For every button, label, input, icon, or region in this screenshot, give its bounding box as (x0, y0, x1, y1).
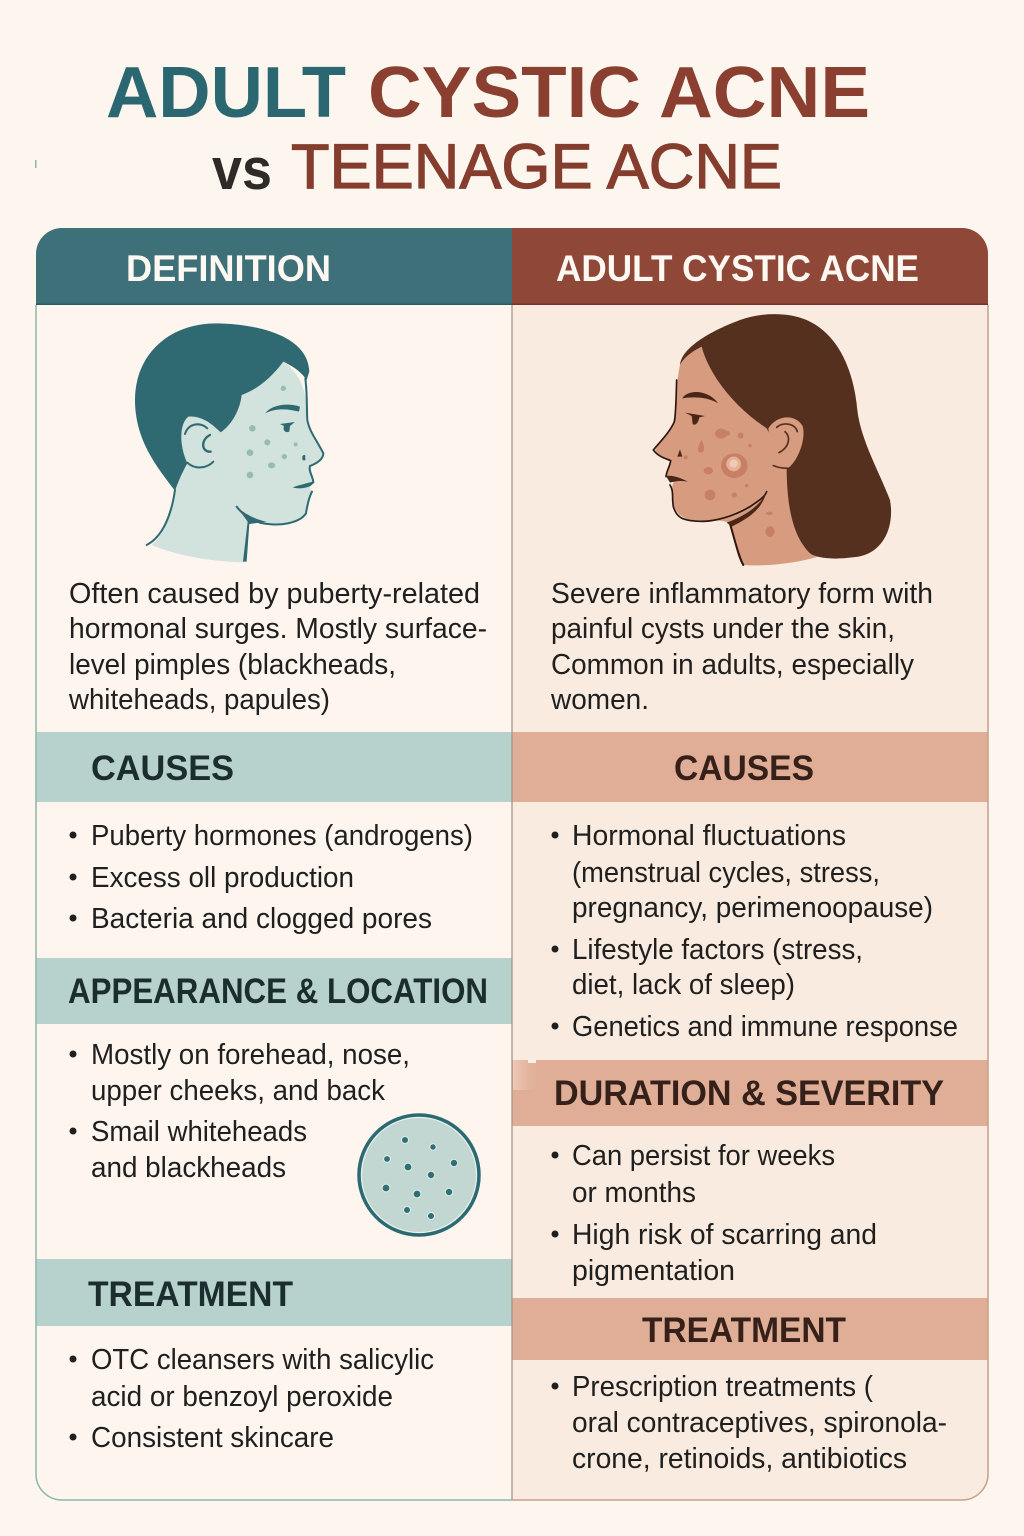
title line 1: ADULT (106, 53, 346, 133)
title line 2: vs (212, 137, 272, 202)
list: causes (adult): diet, lack of sleep) (572, 969, 795, 1001)
list: causes (teenage) (70, 820, 473, 935)
list: duration and severity: Can persist for weeks (572, 1140, 835, 1172)
list: duration and severity: pigmentation (572, 1255, 735, 1287)
definition text: teenage (68, 578, 487, 716)
list: treatment (adult): oral contraceptives, spironola- (572, 1407, 947, 1439)
list: causes (adult): Genetics and immune response (572, 1011, 958, 1043)
list: duration and severity: High risk of scarring and (572, 1219, 877, 1251)
definition text: adult: women. (550, 684, 649, 716)
heading: appearance and location: APPEARANCE & LOCATION (68, 972, 488, 1011)
list: treatment (adult): crone, retinoids, antibiotics (572, 1443, 907, 1475)
definition text: teenage: Often caused by puberty-related (69, 578, 480, 610)
icon: adult face profile (653, 314, 891, 565)
header: adult cystic acne: ADULT CYSTIC ACNE (556, 248, 919, 289)
list: appearance and location: upper cheeks, and back (91, 1075, 385, 1107)
list: treatment (adult) (552, 1371, 947, 1475)
heading: treatment (adult): TREATMENT (642, 1311, 846, 1350)
heading: duration and severity: DURATION & SEVERITY (554, 1074, 944, 1113)
icon: teen face profile (135, 323, 323, 562)
list: causes (adult) (552, 820, 958, 1043)
list: duration and severity: or months (572, 1177, 696, 1209)
icon: skin pore circle (359, 1115, 479, 1235)
definition text: adult: Severe inflammatory form with (551, 578, 933, 610)
definition text: adult (550, 578, 933, 716)
definition text: teenage: level pimples (blackheads, (69, 649, 396, 681)
definition text: teenage: hormonal surges. Mostly surface- (69, 613, 487, 645)
list: treatment (adult): Prescription treatments ( (572, 1371, 873, 1403)
list: causes (teenage): Excess oll production (91, 862, 354, 894)
definition text: adult: painful cysts under the skin, (551, 613, 895, 645)
title (106, 53, 870, 202)
title line 1 (106, 53, 870, 133)
list: causes (teenage): Puberty hormones (androgens) (91, 820, 473, 852)
list: duration and severity (552, 1140, 877, 1287)
list: appearance and location (70, 1039, 410, 1184)
heading: causes (adult): CAUSES (674, 749, 814, 788)
heading: treatment (teenage): TREATMENT (88, 1275, 293, 1314)
comparison table (36, 228, 988, 1500)
header: definition: DEFINITION (126, 248, 331, 289)
list: causes (teenage): Bacteria and clogged pores (91, 903, 432, 935)
list: causes (adult): (menstrual cycles, stress, (572, 857, 880, 889)
list: causes (adult): Hormonal fluctuations (572, 820, 846, 852)
list: appearance and location: Smail whiteheads (91, 1116, 307, 1148)
list: treatment (teenage): Consistent skincare (91, 1422, 334, 1454)
heading: causes (teenage): CAUSES (91, 749, 234, 788)
title line 1: CYSTIC ACNE (368, 53, 870, 133)
list: causes (adult): pregnancy, perimenoopause) (572, 892, 933, 924)
list: causes (adult): Lifestyle factors (stress, (572, 934, 863, 966)
list: treatment (teenage): acid or benzoyl peroxide (91, 1381, 393, 1413)
definition text: teenage: whiteheads, papules) (68, 684, 330, 716)
list: treatment (teenage) (70, 1344, 434, 1454)
list: treatment (teenage): OTC cleansers with salicylic (91, 1344, 434, 1376)
title line 2: TEENAGE ACNE (291, 132, 782, 202)
list: appearance and location: Mostly on forehead, nose, (91, 1039, 410, 1071)
list: appearance and location: and blackheads (91, 1152, 286, 1184)
definition text: adult: Common in adults, especially (551, 649, 914, 681)
